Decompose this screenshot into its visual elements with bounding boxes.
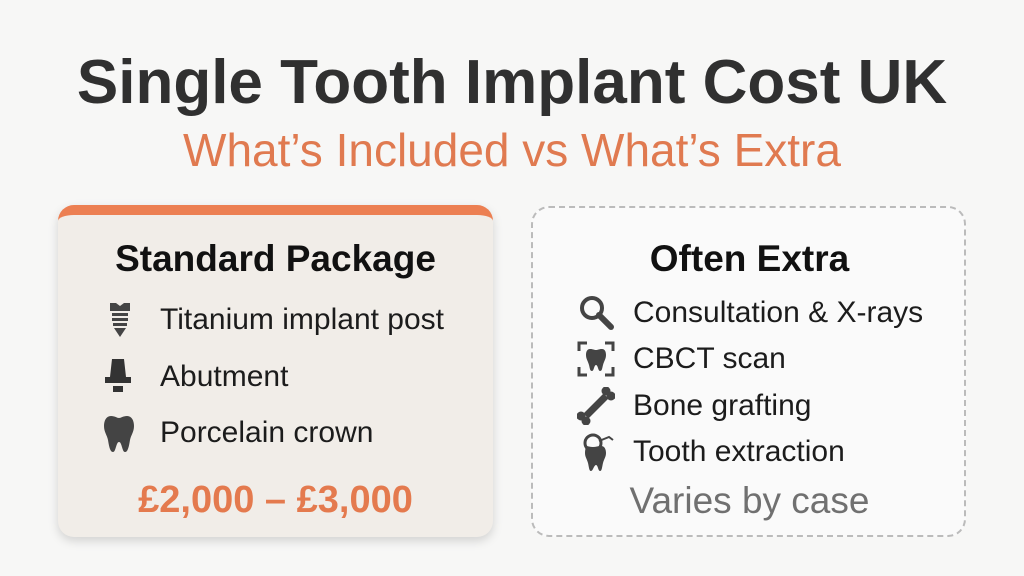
text: abutment: Abutment	[160, 360, 288, 393]
price: £2,000 – £3,000	[138, 479, 413, 521]
icon: abutment	[105, 359, 131, 392]
subtitle: What’s Included vs What’s Extra	[183, 124, 841, 176]
icon: tooth extraction	[584, 434, 614, 471]
heading: often extra: Often Extra	[650, 238, 849, 279]
icon: bone	[577, 387, 615, 425]
text: cbct scan: CBCT scan	[633, 342, 786, 375]
panel: standard package	[58, 205, 493, 537]
panel: often extra	[531, 206, 966, 537]
heading: standard package: Standard Package	[115, 238, 436, 279]
title: Single Tooth Implant Cost UK	[77, 48, 947, 117]
icon: magnifier	[580, 296, 614, 330]
icon: tooth	[104, 416, 134, 452]
text: consultation: Consultation & X-rays	[633, 296, 923, 329]
text: titanium implant post: Titanium implant post	[160, 303, 444, 336]
note: varies by case: Varies by case	[630, 480, 869, 521]
icon: cbct scan	[578, 342, 614, 376]
text: bone grafting: Bone grafting	[633, 389, 811, 422]
text: tooth extraction: Tooth extraction	[633, 435, 845, 468]
text: porcelain crown: Porcelain crown	[160, 416, 373, 449]
icon: implant post	[110, 303, 130, 337]
